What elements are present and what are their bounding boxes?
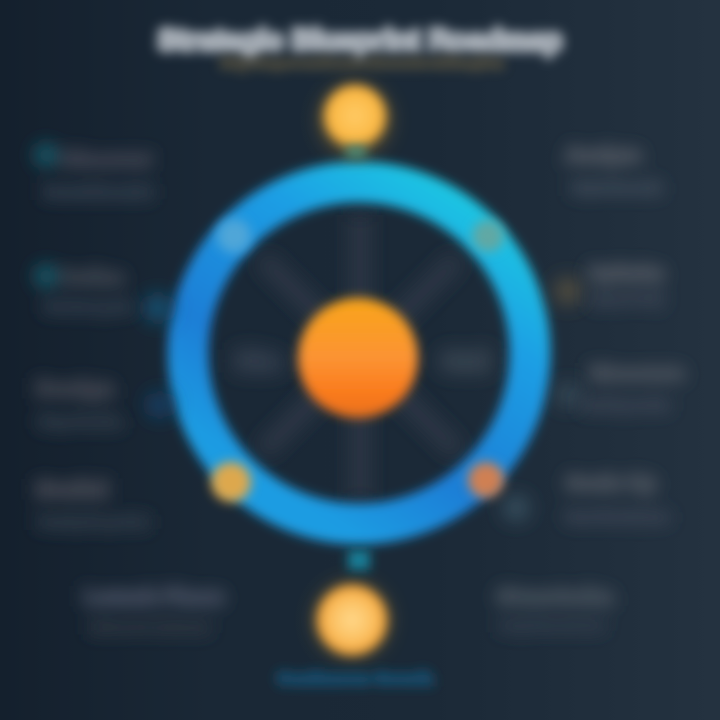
- left label 3: Design: [36, 376, 114, 401]
- left label 3: [36, 376, 122, 431]
- right label 1: [565, 144, 662, 197]
- subtitle: Key stages and core elements of the plan: [222, 58, 502, 70]
- left label 5: Launch Phase: [84, 584, 224, 609]
- ring node: lower left: [211, 462, 251, 502]
- left label 4: Develop the product: [38, 514, 148, 531]
- right label 2: [588, 262, 664, 308]
- left label 5: [84, 584, 224, 636]
- right label 4: Scale Up: [566, 472, 656, 495]
- right label 5: Sustain: [497, 584, 613, 609]
- left label 2: Set clear goals: [44, 299, 132, 316]
- title: Strategic Blueprint Roadmap: [158, 22, 562, 57]
- connector marks: [145, 278, 581, 520]
- right label 4: Grow the business: [565, 509, 669, 526]
- bottom node: [314, 582, 390, 658]
- right label 1: Analyze: [565, 144, 641, 167]
- left label 5: Release to customers: [90, 619, 210, 636]
- top node: [319, 84, 391, 156]
- ring node: lower right: [468, 462, 504, 498]
- left label 4: Build: [36, 477, 108, 502]
- right label 5: [497, 584, 613, 634]
- left label 1: Discover: [62, 149, 152, 171]
- inner label blobs: Goal: [443, 351, 487, 373]
- connector stems: [346, 146, 370, 570]
- left label 2: [33, 263, 132, 316]
- ring node: upper right: [472, 220, 504, 252]
- inner label blobs: [237, 351, 487, 373]
- spokes: [262, 215, 458, 500]
- inner label blobs: Plan: [237, 351, 279, 373]
- footer label: Continuous Growth: [278, 669, 432, 688]
- left label 2: Define: [62, 267, 124, 289]
- right label 5: Long-term success: [500, 617, 604, 634]
- ring node: upper left: [217, 219, 251, 253]
- left label 1: Research the market: [44, 184, 152, 201]
- right label 3: Measure: [590, 362, 684, 385]
- central orange circle: [298, 298, 418, 418]
- right label 4: [565, 472, 669, 526]
- left label 1: [33, 142, 152, 201]
- right label 3: [580, 362, 684, 414]
- right label 1: Review the results: [572, 180, 662, 197]
- left label 3: Shape the idea: [38, 414, 122, 431]
- left label 4: [36, 477, 148, 531]
- ring: [188, 182, 530, 524]
- right label 3: Track key metrics: [580, 397, 670, 414]
- right label 2: Improve steadily: [590, 291, 664, 308]
- right label 2: Optimize: [588, 262, 664, 285]
